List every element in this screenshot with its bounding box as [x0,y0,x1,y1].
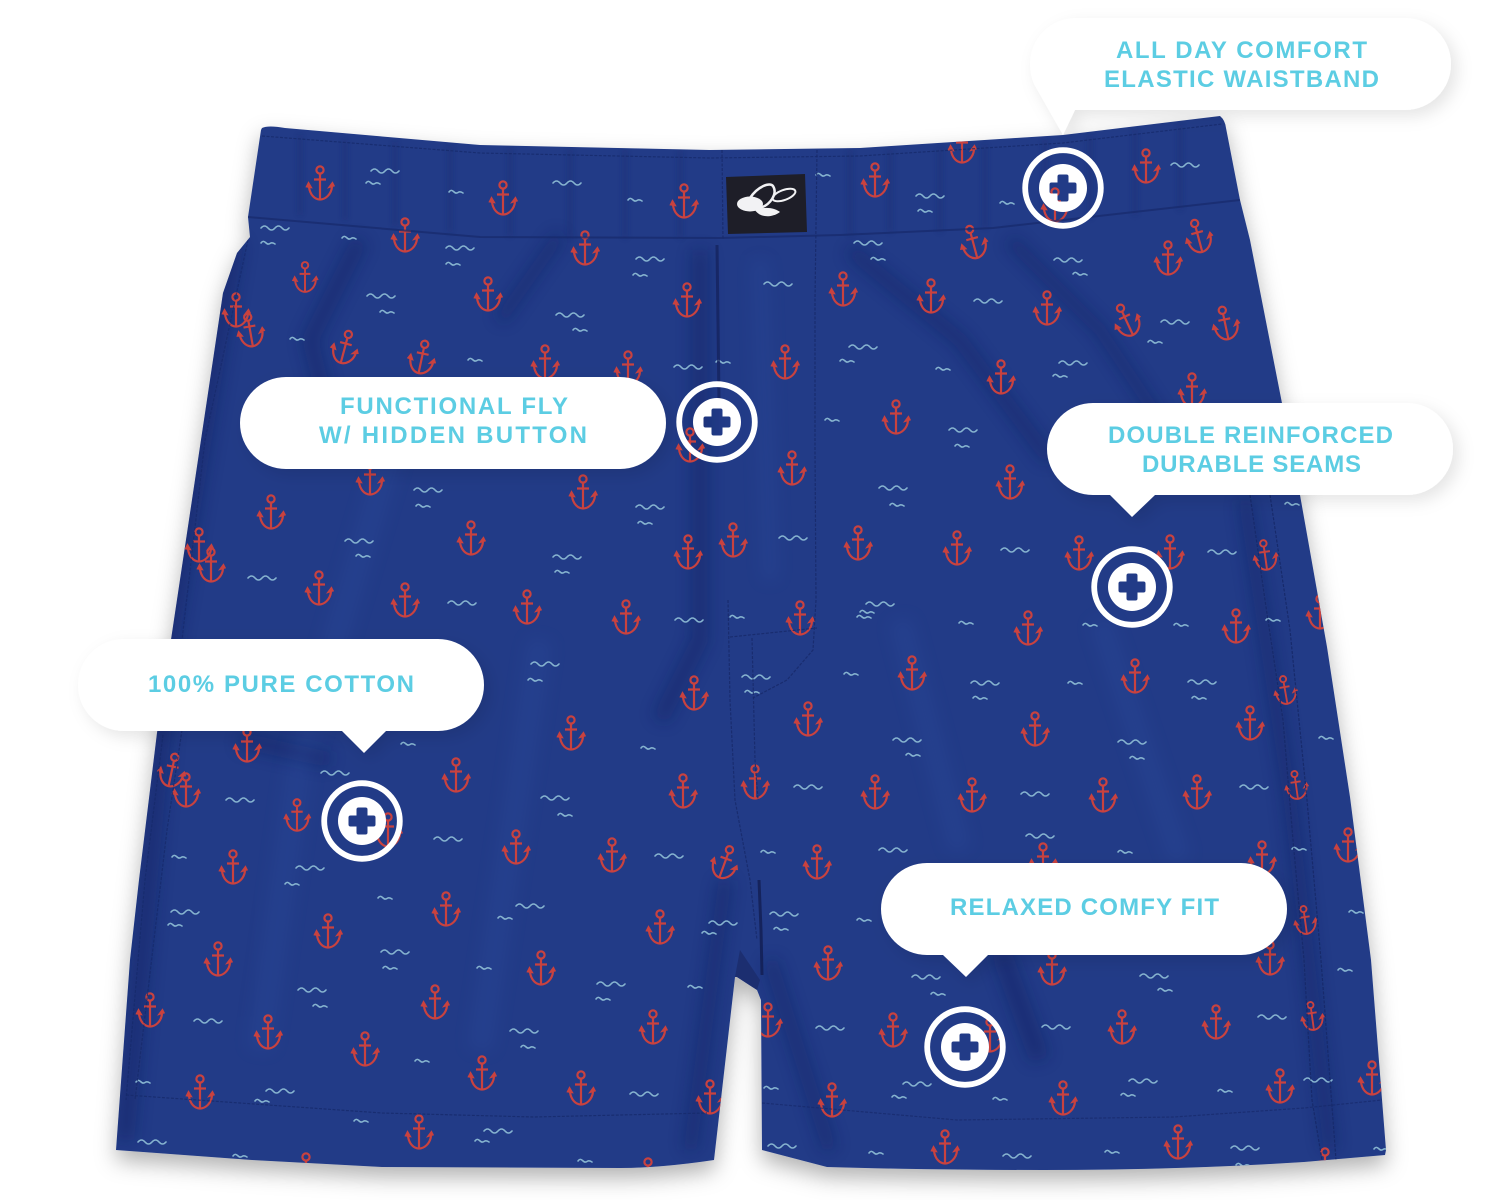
bubble shape [881,863,1287,977]
crotch seam shadow [759,880,762,975]
callout text: W/ HIDDEN BUTTON [319,422,587,449]
wave print [136,163,1388,1166]
callout: all day comfort elastic waistband [1030,18,1451,135]
callout text: DOUBLE REINFORCED [1108,422,1393,449]
shorts silhouette with drop shadow [116,116,1386,1170]
waistband gathers [300,125,1180,238]
icon: plus button fly [679,384,755,460]
callout: pure cotton [78,639,484,753]
callout: double reinforced seams [1047,403,1453,517]
callout text: 100% PURE COTTON [148,671,414,698]
callout: relaxed comfy fit [881,863,1287,977]
callout text: FUNCTIONAL FLY [340,393,568,420]
stitching and seams [126,124,1382,1160]
callout text: ALL DAY COMFORT [1116,37,1367,64]
fly opening shadow [717,245,719,400]
brand label with fish logo [726,174,807,234]
lower fly panel [735,950,760,990]
icon: plus button cotton [324,783,400,859]
bubble shape [1030,18,1451,135]
callout: functional fly [240,377,666,469]
fabric pattern and folds [125,124,1388,1192]
boxer shorts [116,116,1388,1192]
callout text: RELAXED COMFY FIT [950,894,1219,921]
anchor print [136,129,1386,1191]
fish logo [737,184,797,216]
bubble shape [240,377,666,469]
icon: plus button fit [927,1009,1003,1085]
callout text: ELASTIC WAISTBAND [1104,66,1379,93]
icon: plus button waistband [1025,150,1101,226]
bubble shape [1047,403,1453,517]
callout text: DURABLE SEAMS [1142,451,1361,478]
bubble shape [78,639,484,753]
icon: plus button seams [1094,549,1170,625]
black woven label [726,174,807,234]
